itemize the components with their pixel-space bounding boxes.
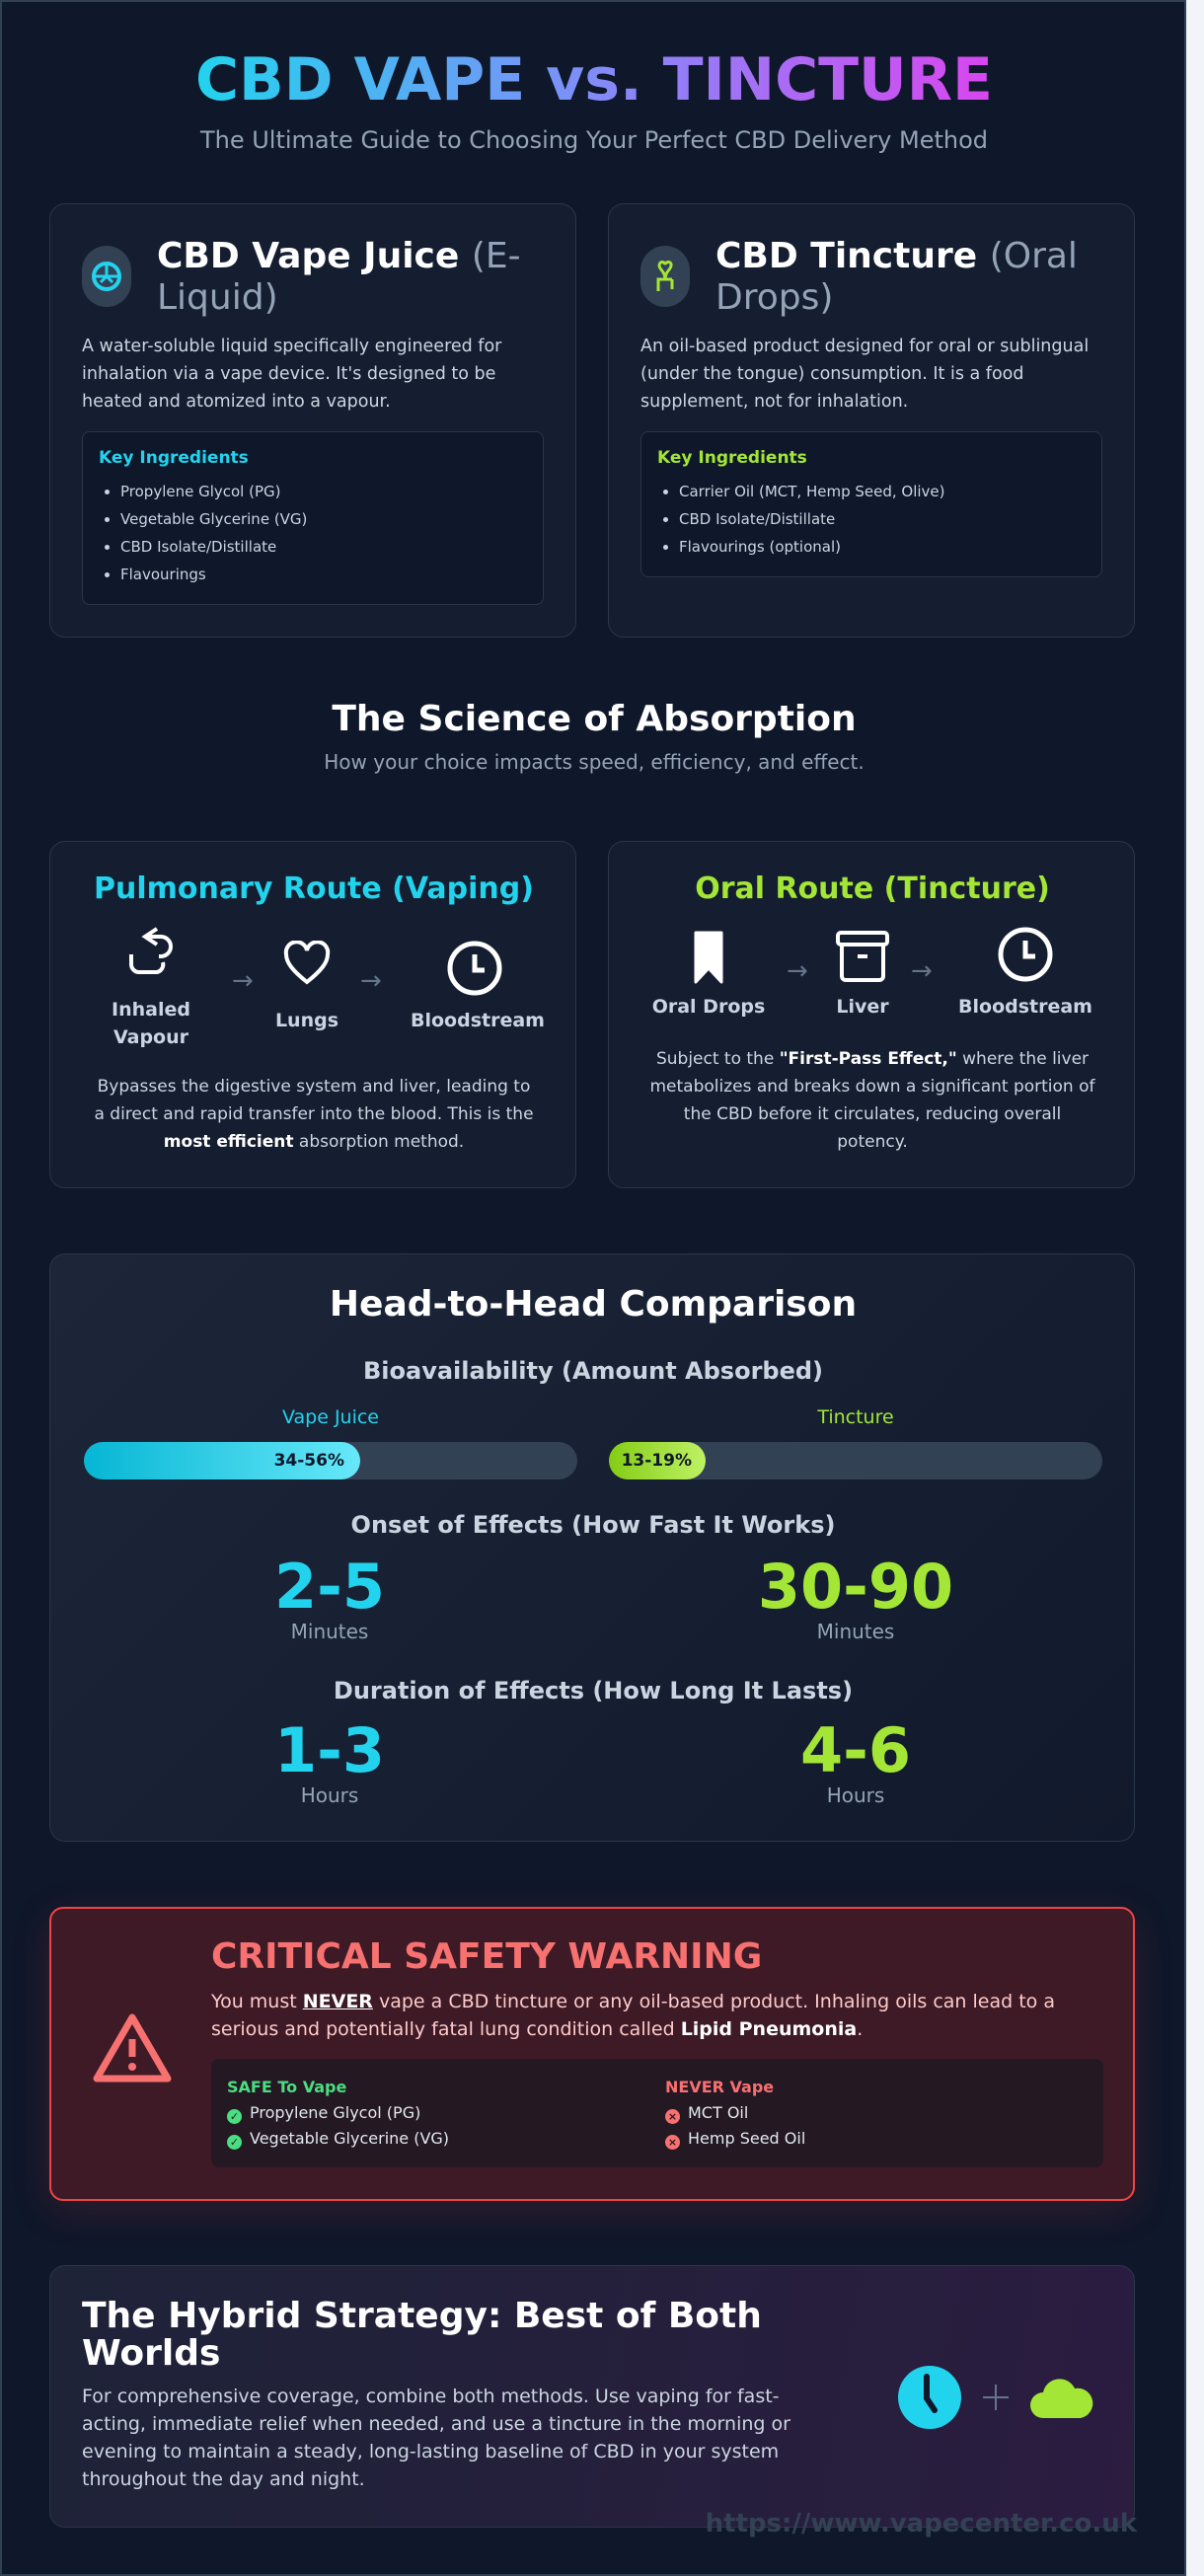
safe list: Vegetable Glycerine (VG) — [250, 2129, 449, 2148]
ingredients: CBD Isolate/Distillate — [679, 510, 835, 528]
ingredients: Vegetable Glycerine (VG) — [120, 510, 307, 528]
subheading: duration: Duration of Effects (How Long It Lasts) — [334, 1677, 853, 1705]
description: Bypasses the digestive system and liver, leading to a direct and rapid transfer into the blood. This is the most efficient absorption method. — [94, 1077, 534, 1152]
panel: pulmonary route: → — [360, 966, 382, 996]
ingredients — [640, 431, 1102, 577]
never list — [665, 2078, 805, 2150]
watermark: https://www.vapecenter.co.uk — [706, 2509, 1137, 2538]
heading: Oral Route (Tincture) — [695, 871, 1050, 906]
panel: pulmonary route: Lungs — [275, 1010, 339, 1031]
heading: CBD Vape Juice (E-Liquid) — [157, 236, 521, 318]
icon: clock — [999, 928, 1052, 981]
panel: oral route: Liver — [836, 996, 889, 1018]
text: For comprehensive coverage, combine both methods. Use vaping for fast-acting, immediate relief when needed, and use a tincture in the morning or evening to maintain a steady, long-lasting baseline of CBD in your system throughout the day and night. — [82, 2386, 790, 2490]
stat: vape onset: 2-5 — [274, 1551, 385, 1623]
description: Subject to the "First-Pass Effect," where the liver metabolizes and breaks down a significant portion of the CBD before it circulates, reducing overall potency. — [649, 1049, 1094, 1152]
safe list: Propylene Glycol (PG) — [250, 2103, 420, 2122]
ingredients: Propylene Glycol (PG) — [120, 483, 280, 500]
section subtitle: How your choice impacts speed, efficiency, and effect. — [324, 750, 865, 774]
heading: The Hybrid Strategy: Best of Both Worlds — [82, 2296, 762, 2374]
bar: tincture: 13-19% — [622, 1451, 692, 1471]
icon: clock + cloud — [898, 2366, 1093, 2429]
safe list: SAFE To Vape — [227, 2078, 346, 2096]
bar: tincture — [609, 1442, 1102, 1479]
ingredients: Flavourings — [120, 566, 206, 583]
icon: plant — [640, 246, 690, 307]
icon: lungs/heart — [284, 941, 330, 985]
safe list — [227, 2078, 449, 2150]
never list: NEVER Vape — [665, 2078, 774, 2096]
subheading: bioavailability: Bioavailability (Amount Absorbed) — [363, 1357, 823, 1385]
heading: Pulmonary Route (Vaping) — [94, 871, 534, 906]
panel: oral route: Oral Drops — [652, 996, 765, 1018]
stat: vape duration: 1-3 — [274, 1714, 385, 1786]
bar: vape — [84, 1442, 577, 1479]
panel: head-to-head comparison — [49, 1253, 1135, 1842]
subtitle: The Ultimate Guide to Choosing Your Perfect CBD Delivery Method — [200, 126, 988, 154]
bar: vape: 34-56% — [274, 1451, 344, 1471]
icon: clock — [448, 942, 501, 995]
panel: tincture — [608, 203, 1135, 638]
panel: oral route: Bloodstream — [958, 996, 1092, 1018]
heading: CRITICAL SAFETY WARNING — [211, 1936, 762, 1977]
title: CBD VAPE vs. TINCTURE — [195, 45, 993, 114]
icon: vape — [82, 246, 131, 307]
panel: vape juice — [49, 203, 576, 638]
stat: tincture duration: 4-6 — [800, 1714, 911, 1786]
panel: head-to-head comparison: Minutes — [291, 1620, 368, 1643]
panel: hybrid strategy — [49, 2265, 1135, 2528]
safe list: ✓ — [230, 2110, 239, 2123]
label: tincture: Tincture — [817, 1406, 894, 1428]
panel: head-to-head comparison: Minutes — [817, 1620, 894, 1643]
panel: pulmonary route: Inhaled Vapour — [112, 999, 190, 1048]
panel: safety warning — [49, 1907, 1135, 2201]
panel: oral route: → — [787, 956, 808, 986]
description: An oil-based product designed for oral or sublingual (under the tongue) consumption. It is a food supplement, not for inhalation. — [640, 337, 1089, 412]
ingredients: Carrier Oil (MCT, Hemp Seed, Olive) — [679, 483, 945, 500]
never list: × — [668, 2110, 677, 2123]
safe/never box — [211, 2059, 1103, 2167]
ingredients: CBD Isolate/Distillate — [120, 538, 276, 556]
section heading: science: The Science of Absorption — [332, 699, 857, 739]
never list: Hemp Seed Oil — [688, 2129, 805, 2148]
never list: MCT Oil — [688, 2103, 748, 2122]
icon: bookmark — [695, 932, 722, 984]
panel: pulmonary route — [49, 841, 576, 1188]
panel: head-to-head comparison: Hours — [301, 1783, 358, 1807]
panel: head-to-head comparison: Hours — [827, 1783, 884, 1807]
ingredients: Key Ingredients — [657, 448, 807, 468]
never list: × — [668, 2136, 677, 2149]
description: A water-soluble liquid specifically engineered for inhalation via a vape device. It's designed to be heated and atomized into a vapour. — [82, 337, 501, 412]
heading: Head-to-Head Comparison — [330, 1284, 857, 1325]
panel: oral route: → — [911, 956, 933, 986]
panel: oral route — [608, 841, 1135, 1188]
stat: tincture onset: 30-90 — [758, 1551, 953, 1623]
icon: archive — [836, 931, 889, 982]
text: You must NEVER vape a CBD tincture or any oil-based product. Inhaling oils can lead to a serious and potentially fatal lung condition called Lipid Pneumonia. — [211, 1991, 1055, 2040]
ingredients: Flavourings (optional) — [679, 538, 841, 556]
ingredients — [82, 431, 544, 605]
icon: warning — [93, 2013, 172, 2083]
ingredients: Key Ingredients — [99, 448, 249, 468]
panel: pulmonary route: Bloodstream — [411, 1010, 545, 1031]
panel: pulmonary route: → — [232, 966, 254, 996]
safe list: ✓ — [230, 2136, 239, 2149]
icon: inhale — [129, 927, 173, 974]
heading: CBD Tincture (Oral Drops) — [715, 236, 1078, 318]
subheading: onset: Onset of Effects (How Fast It Works) — [351, 1511, 835, 1539]
label: vape: Vape Juice — [282, 1406, 379, 1428]
